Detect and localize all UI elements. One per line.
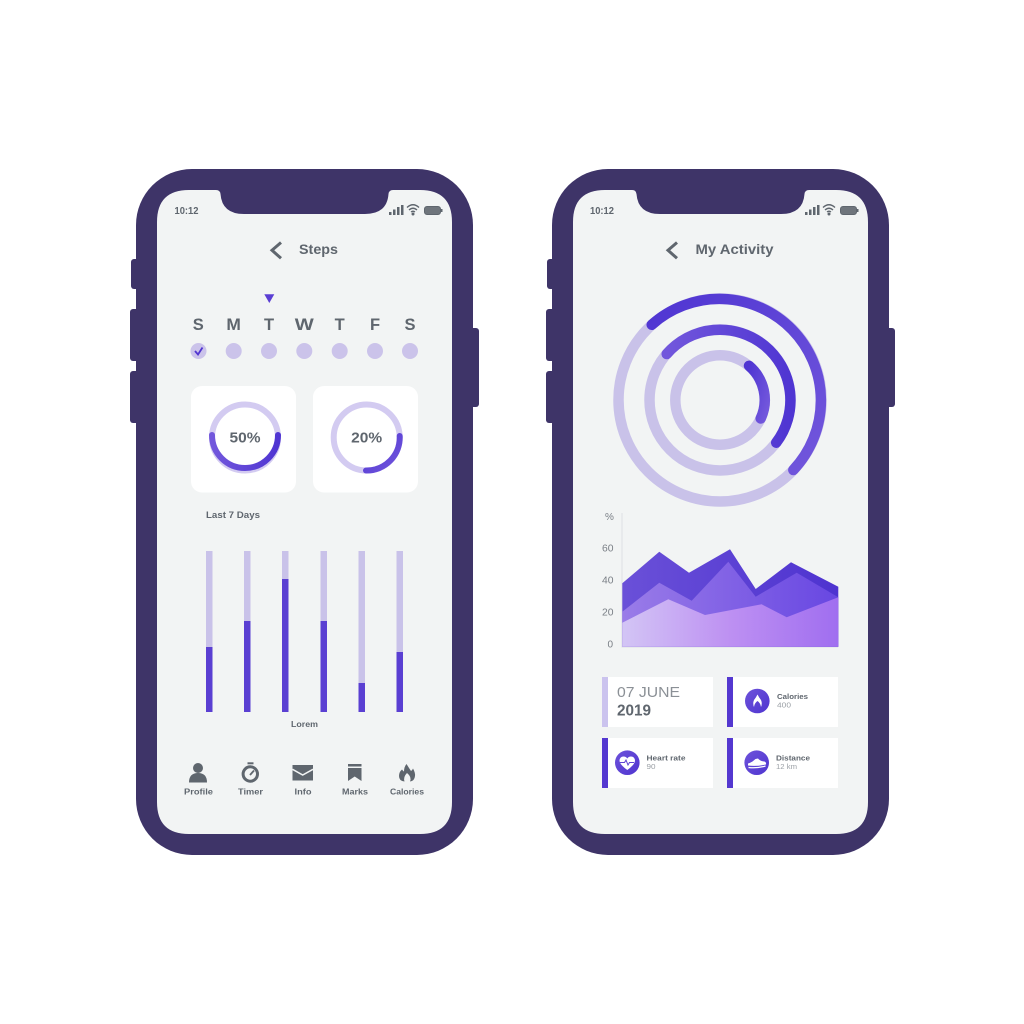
front area: [622, 597, 838, 647]
weekday letters: F: [370, 316, 380, 334]
date card: 07 JUNE: [617, 684, 680, 701]
heading: Steps: Steps: [299, 241, 338, 257]
distance card: [727, 738, 838, 788]
phone: My Activity screen: [546, 169, 895, 855]
icon: shoe: [744, 750, 769, 775]
phone: Steps screen: [130, 169, 479, 855]
phone frame: [546, 169, 895, 855]
nav: Info: [292, 765, 313, 796]
axis labels: 0: [608, 640, 614, 650]
axis labels: 20: [602, 608, 614, 618]
heart rate card: Heart rate: [646, 754, 686, 762]
area chart: [602, 512, 838, 650]
signal icon: [805, 205, 820, 215]
axis labels: [602, 512, 614, 650]
icon: heart: [615, 750, 640, 775]
nav: Marks: [342, 764, 369, 796]
date card: [602, 677, 713, 727]
time: 10:12: [174, 206, 199, 217]
nav: Info: Info: [294, 788, 312, 796]
progress card 20%: [313, 386, 418, 492]
wifi icon: [823, 205, 835, 215]
label: Lorem: Lorem: [291, 720, 318, 729]
wifi icon: [407, 205, 419, 215]
current day marker: [264, 294, 274, 303]
distance card: 12 km: [776, 762, 797, 771]
calories card: 400: [777, 700, 791, 710]
weekday letters: S: [193, 316, 204, 334]
screen with notch: [573, 190, 868, 834]
battery icon: [424, 206, 442, 214]
weekday letters: [193, 316, 416, 334]
nav: Profile: Profile: [184, 788, 214, 796]
nav: Timer: [238, 762, 263, 796]
nav: Marks: Marks: [342, 788, 369, 796]
date card: 2019: [617, 702, 651, 720]
calories card: [727, 677, 838, 727]
bar chart: [206, 551, 403, 712]
weekday letters: T: [335, 316, 345, 334]
progress card 50%: [191, 386, 296, 492]
status bar: [174, 205, 442, 217]
axis line: [622, 513, 838, 647]
nav: Profile: [184, 763, 214, 796]
back chevron: [272, 242, 281, 258]
distance card: Distance: [776, 754, 810, 762]
icon: flame: [745, 689, 770, 713]
axis labels: 60: [602, 544, 614, 554]
calories card: Calories: [777, 692, 808, 701]
heart rate card: [602, 738, 713, 788]
back chevron: [668, 242, 677, 258]
nav: Calories: Calories: [390, 788, 425, 796]
nav: Calories: [390, 764, 425, 796]
check mark: [195, 348, 202, 354]
progress card 20%: 20%: [351, 430, 382, 446]
battery icon: [840, 206, 858, 214]
heart rate card: 90: [646, 762, 656, 771]
middle area: [622, 562, 838, 647]
screen with notch: [157, 190, 452, 834]
nav: Timer: Timer: [238, 788, 263, 796]
phone frame: [130, 169, 479, 855]
label: Last 7 Days: Last 7 Days: [206, 510, 260, 520]
weekday dots: [190, 343, 418, 359]
weekday letters: W: [295, 316, 314, 334]
progress card 50%: 50%: [230, 430, 260, 446]
heading: My Activity: My Activity: [696, 241, 774, 257]
concentric ring chart: [618, 298, 822, 502]
weekday letters: S: [404, 316, 416, 334]
weekday letters: T: [264, 316, 274, 334]
weekday letters: M: [226, 316, 241, 334]
back area: [622, 549, 838, 647]
axis labels: %: [605, 512, 614, 523]
time: 10:12: [590, 206, 614, 217]
status bar: [590, 205, 858, 217]
axis labels: 40: [602, 576, 614, 586]
signal icon: [389, 205, 404, 215]
